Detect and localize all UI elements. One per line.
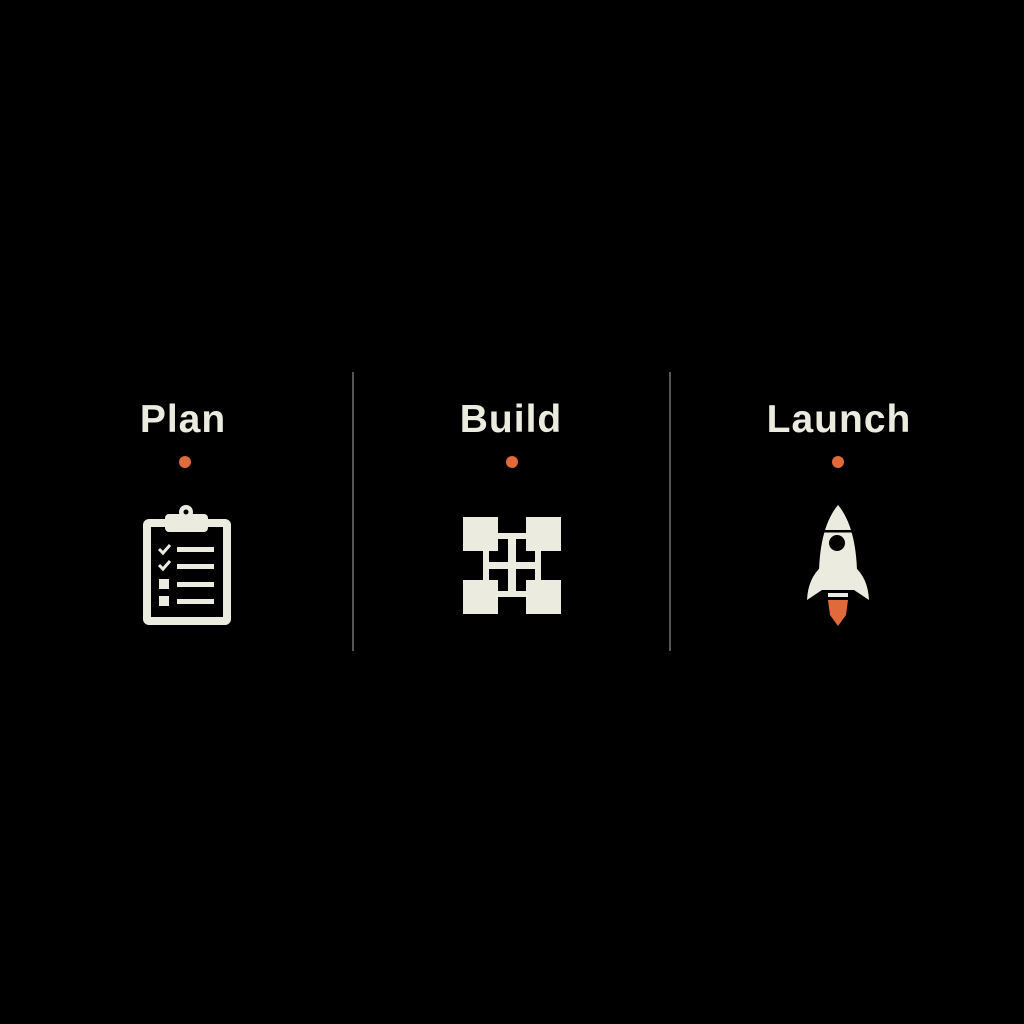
divider 1 (352, 372, 354, 651)
heading: Build: Build (460, 398, 562, 441)
heading: Launch: Launch (767, 398, 911, 441)
icon: rocket (807, 505, 869, 626)
dot: Plan (179, 456, 191, 468)
dot: Launch (832, 456, 844, 468)
divider 2 (669, 372, 671, 651)
icon: build grid (463, 517, 561, 614)
dot: Build (506, 456, 518, 468)
heading: Plan: Plan (140, 398, 226, 441)
icon: clipboard (143, 505, 231, 625)
